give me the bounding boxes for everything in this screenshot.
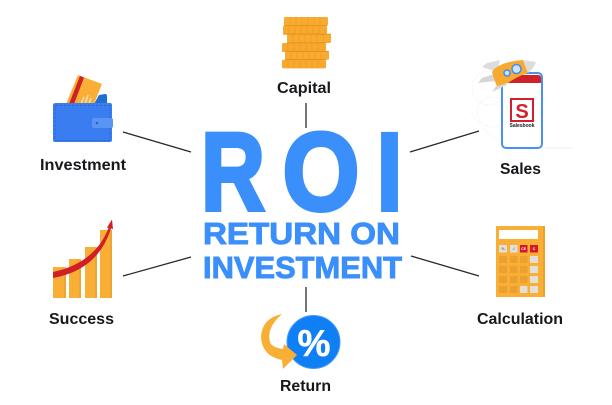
icon: percent coin with arrow <box>261 314 340 369</box>
icon: phone with rocket <box>470 60 572 148</box>
icon: coin stack <box>282 17 331 68</box>
icon: calculator: CE <box>521 247 527 251</box>
connector: sales <box>410 131 479 152</box>
connector: capital <box>305 103 307 128</box>
icon: percent coin with arrow: % <box>298 323 330 364</box>
connector: calculation <box>411 256 479 276</box>
title: ROI: I <box>376 111 402 234</box>
icon: bar chart with arrow <box>53 220 113 298</box>
title: ROI: O <box>282 111 360 234</box>
label: investment: Investment <box>40 157 127 174</box>
icon: phone with rocket: S <box>515 101 529 123</box>
connector: success <box>123 257 191 276</box>
label: return: Return <box>280 378 331 395</box>
connector: return <box>305 287 307 312</box>
connector: investment <box>123 132 191 152</box>
icon: calculator: √ <box>513 247 515 251</box>
icon: wallet <box>53 75 113 142</box>
label: capital: Capital <box>277 80 331 97</box>
icon: calculator: C <box>533 247 536 251</box>
label: calculation: Calculation <box>477 311 563 328</box>
icon: phone with rocket: Salesbook <box>509 123 535 129</box>
icon: calculator <box>496 226 545 297</box>
subtitle: return on: RETURN ON <box>203 217 400 251</box>
title: ROI <box>201 111 402 234</box>
label: success: Success <box>49 311 114 328</box>
title: ROI: R <box>201 111 265 234</box>
icon: calculator: % <box>501 247 505 251</box>
subtitle: investment: INVESTMENT <box>203 251 402 285</box>
label: sales: Sales <box>500 161 541 178</box>
